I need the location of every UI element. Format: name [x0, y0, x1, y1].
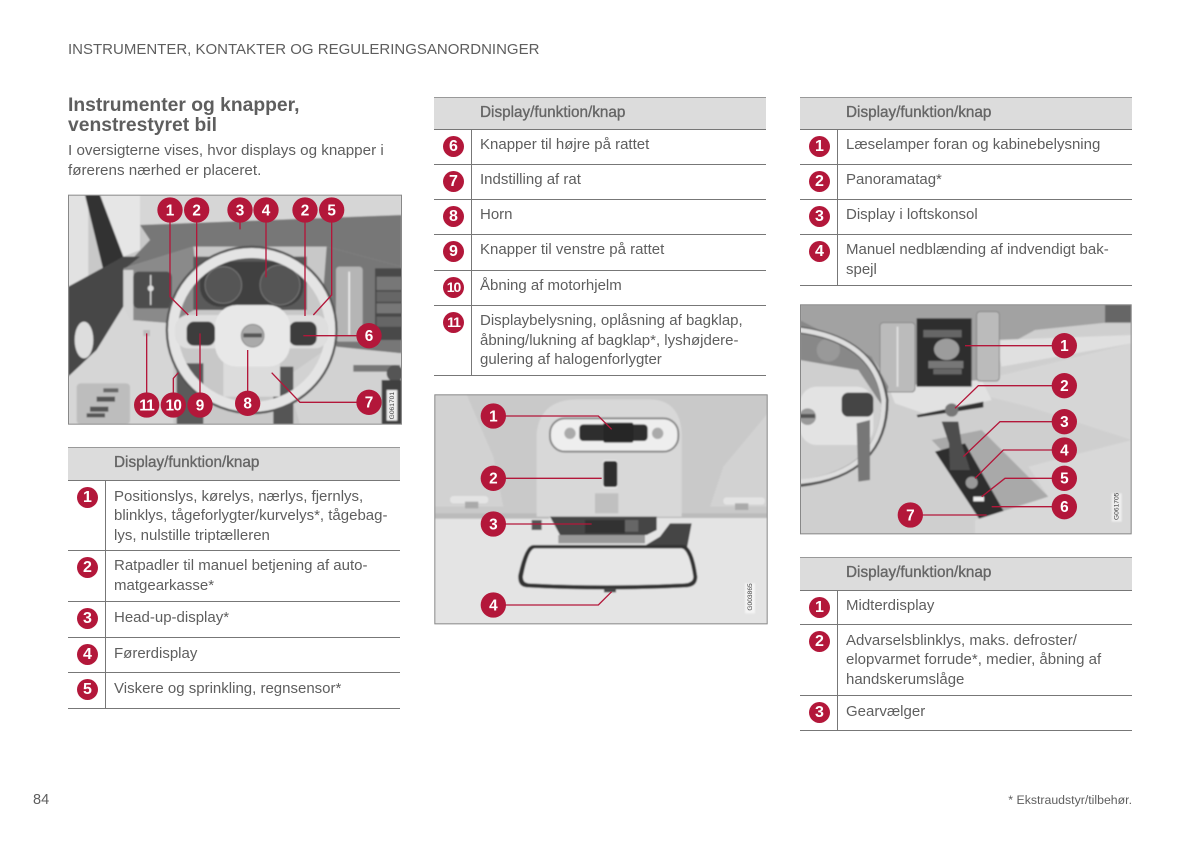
photo: centre console: G061705 [1113, 492, 1120, 520]
photo: steering wheel and dashboard [68, 194, 402, 425]
numbered markers: 6 [1060, 499, 1069, 516]
row 11: 11 [447, 314, 460, 330]
row 1: blinklys, tågeforlygter/kurvelys*, tågebag- [114, 507, 387, 524]
intro text: førerens nærhed er placeret. [68, 162, 261, 179]
table: centre console items 1-3 [800, 557, 1132, 731]
row 1 [800, 130, 1132, 165]
row 2: Ratpadler til manuel betjening af auto- [114, 557, 368, 574]
row 4: spejl [846, 261, 877, 278]
table: items 1-5 [68, 447, 400, 709]
numbered markers: 5 [1060, 471, 1069, 488]
row 1: Læselamper foran og kabinebelysning [846, 136, 1100, 153]
row 2: Advarselsblinklys, maks. defroster/ [846, 632, 1077, 648]
row 1: lys, nulstille triptælleren [114, 527, 270, 544]
row 10: 10 [447, 279, 460, 295]
row 8 [434, 200, 766, 235]
numbered markers [898, 333, 1077, 528]
row 1: Midterdisplay [846, 597, 934, 614]
row 11: Displaybelysning, oplåsning af bagklap, [480, 312, 743, 329]
numbered markers: 1 [1060, 338, 1069, 355]
numbered markers: 1 [166, 202, 175, 219]
row 8: Horn [480, 206, 513, 223]
row 5: Viskere og sprinkling, regnsensor* [114, 680, 341, 696]
row 2: matgearkasse* [114, 577, 214, 594]
row 10 [434, 271, 766, 306]
row 3: 3 [83, 610, 92, 627]
table header [68, 448, 400, 481]
row 2: handskerumslåge [846, 671, 964, 688]
row 5: 5 [83, 681, 92, 698]
numbered markers: 4 [262, 202, 271, 219]
row 2: 2 [815, 173, 824, 190]
table header: Display/funktion/knap [846, 104, 991, 121]
row 2 [800, 165, 1132, 200]
row 3 [800, 200, 1132, 235]
row 2: elopvarmet forrude*, medier, åbning af [846, 651, 1101, 668]
numbered markers [481, 403, 506, 618]
numbered markers: 2 [192, 202, 201, 219]
row 7: 7 [449, 173, 458, 190]
row 9: 9 [449, 243, 458, 260]
row 11: åbning/lukning af bagklap*, lyshøjdere- [480, 332, 738, 349]
row 1: 1 [83, 489, 92, 506]
row 3: 3 [815, 208, 824, 225]
photo: overhead console and mirror [434, 394, 768, 624]
row 11: gulering af halogenforlygter [480, 351, 662, 368]
numbered markers: 11 [139, 397, 155, 414]
numbered markers: 3 [1060, 414, 1069, 431]
numbered markers: 3 [236, 202, 244, 219]
row 6: 6 [449, 138, 458, 155]
row 1 [68, 481, 400, 551]
table header: Display/funktion/knap [846, 564, 991, 581]
callout lines [147, 210, 369, 405]
table header [434, 98, 766, 130]
intro text [68, 142, 384, 179]
row 2: 2 [815, 633, 824, 650]
row 4: Førerdisplay [114, 644, 197, 662]
table header: Display/funktion/knap [114, 454, 259, 471]
row 4: Manuel nedblænding af indvendigt bak- [846, 241, 1109, 258]
row 3: Gearvælger [846, 702, 925, 720]
numbered markers: 2 [301, 202, 309, 219]
numbered markers: 7 [365, 395, 373, 412]
table header [800, 98, 1132, 130]
row 6 [434, 130, 766, 165]
row 2 [800, 625, 1132, 696]
row 7: Indstilling af rat [480, 171, 581, 188]
page number: 84 [33, 792, 49, 808]
row 2: 2 [83, 559, 92, 576]
numbered markers: 10 [165, 397, 181, 414]
row 11 [434, 306, 766, 376]
row 4 [800, 235, 1132, 286]
row 3: Display i loftskonsol [846, 206, 978, 223]
row 3: Head-up-display* [114, 608, 229, 626]
section heading [68, 95, 299, 136]
table header [800, 558, 1132, 591]
section heading: Instrumenter og knapper, [68, 95, 299, 116]
table: items 6-11 [434, 97, 766, 376]
row 4 [68, 638, 400, 673]
numbered markers: 3 [489, 516, 498, 533]
page header: INSTRUMENTER, KONTAKTER OG REGULERINGSANORDNINGER [68, 41, 539, 58]
callout lines [910, 346, 1063, 515]
row 2: Panoramatag* [846, 171, 942, 188]
row 10: Åbning af motorhjelm [480, 277, 622, 294]
numbered markers: 4 [1060, 442, 1069, 459]
numbered markers: 8 [243, 396, 252, 413]
numbered markers: 2 [489, 471, 498, 488]
row 9: Knapper til venstre på rattet [480, 241, 664, 258]
section heading: venstrestyret bil [68, 115, 217, 136]
row 3 [68, 602, 400, 638]
numbered markers: 4 [489, 597, 498, 614]
photo: centre console [800, 304, 1132, 534]
numbered markers [134, 197, 382, 418]
footnote: * Ekstraudstyr/tilbehør. [1008, 793, 1132, 807]
row 4: 4 [83, 646, 92, 663]
row 1: 1 [815, 138, 824, 155]
callout lines [493, 416, 612, 605]
row 3 [800, 696, 1132, 731]
row 1: Positionslys, kørelys, nærlys, fjernlys, [114, 488, 363, 504]
numbered markers: 5 [327, 202, 336, 219]
intro text: I oversigterne vises, hvor displays og knapper i [68, 142, 384, 159]
row 1: 1 [815, 599, 824, 616]
row 6: Knapper til højre på rattet [480, 136, 649, 153]
row 9 [434, 235, 766, 271]
numbered markers: 2 [1060, 378, 1069, 395]
table header: Display/funktion/knap [480, 104, 625, 121]
photo: steering wheel and dashboard: G061701 [389, 392, 396, 419]
numbered markers: 1 [489, 408, 498, 425]
row 7 [434, 165, 766, 200]
numbered markers: 7 [906, 507, 915, 524]
row 4: 4 [815, 243, 824, 260]
row 3: 3 [815, 704, 824, 721]
numbered markers: 9 [196, 397, 204, 414]
numbered markers: 6 [365, 328, 373, 345]
row 2 [68, 551, 400, 602]
row 8: 8 [449, 208, 458, 225]
photo: overhead console and mirror: G003865 [747, 583, 754, 611]
row 1 [800, 591, 1132, 625]
table: overhead items 1-4 [800, 97, 1132, 286]
row 5 [68, 673, 400, 709]
